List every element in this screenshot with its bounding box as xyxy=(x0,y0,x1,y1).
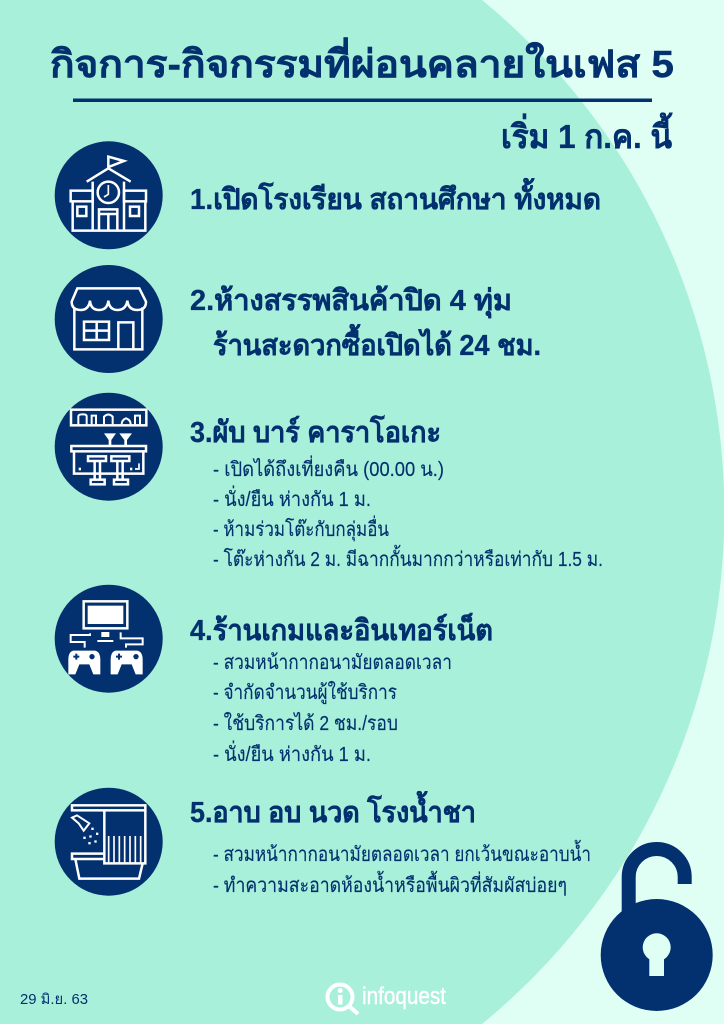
item 5 details: - สวมหน้ากากอนามัยตลอดเวลา ยกเว้นขณะอาบน้ำ xyxy=(213,840,591,866)
infoquest logo: infoquest xyxy=(362,983,446,1010)
icon: open padlock xyxy=(601,849,713,1011)
icon: bath and shower xyxy=(55,788,163,896)
item 3 details: - นั่ง/ยืน ห่างกัน 1 ม. xyxy=(213,485,371,511)
item 2 heading xyxy=(190,285,541,362)
item 3 details xyxy=(213,455,603,571)
item 3 details: - โต๊ะห่างกัน 2 ม. มีฉากกั้นมากกว่าหรือเท่ากับ 1.5 ม. xyxy=(213,545,603,571)
item 2 heading: 2.ห้างสรรพสินค้าปิด 4 ทุ่ม xyxy=(190,285,512,318)
item 5 details: - ทำความสะอาดห้องน้ำหรือพื้นผิวที่สัมผัสบ่อยๆ xyxy=(213,871,567,897)
date: 29 มิ.ย. 63 xyxy=(20,992,88,1008)
icon: shop xyxy=(55,265,163,373)
item 5 details xyxy=(213,840,591,897)
item 4 details: - จำกัดจำนวนผู้ใช้บริการ xyxy=(213,681,397,705)
icon: bar xyxy=(55,393,163,501)
infoquest logo xyxy=(328,983,446,1014)
item 4 details: - สวมหน้ากากอนามัยตลอดเวลา xyxy=(213,652,452,674)
item 3 details: - ห้ามร่วมโต๊ะกับกลุ่มอื่น xyxy=(213,515,389,542)
item 1 heading: 1.เปิดโรงเรียน สถานศึกษา ทั้งหมด xyxy=(190,177,601,216)
item 3 heading: 3.ผับ บาร์ คาราโอเกะ xyxy=(190,414,441,449)
item 5 heading: 5.อาบ อบ นวด โรงน้ำชา xyxy=(190,790,476,829)
item 2 heading: ร้านสะดวกซื้อเปิดได้ 24 ชม. xyxy=(213,323,541,362)
subtitle: start date: เริ่ม 1 ก.ค. นี้ xyxy=(501,112,673,155)
title rule xyxy=(73,98,652,102)
icon: school xyxy=(55,141,163,249)
item 3 details: - เปิดได้ถึงเที่ยงคืน (00.00 น.) xyxy=(213,455,444,481)
item 4 details: - นั่ง/ยืน ห่างกัน 1 ม. xyxy=(213,740,371,766)
item 4 details xyxy=(213,652,452,766)
item 4 details: - ใช้บริการได้ 2 ชม./รอบ xyxy=(213,712,398,735)
icon: computer and game controllers xyxy=(55,585,163,693)
item 4 heading: 4.ร้านเกมและอินเทอร์เน็ต xyxy=(190,612,493,647)
title: กิจการ-กิจกรรมที่ผ่อนคลายในเฟส 5 xyxy=(50,37,674,86)
